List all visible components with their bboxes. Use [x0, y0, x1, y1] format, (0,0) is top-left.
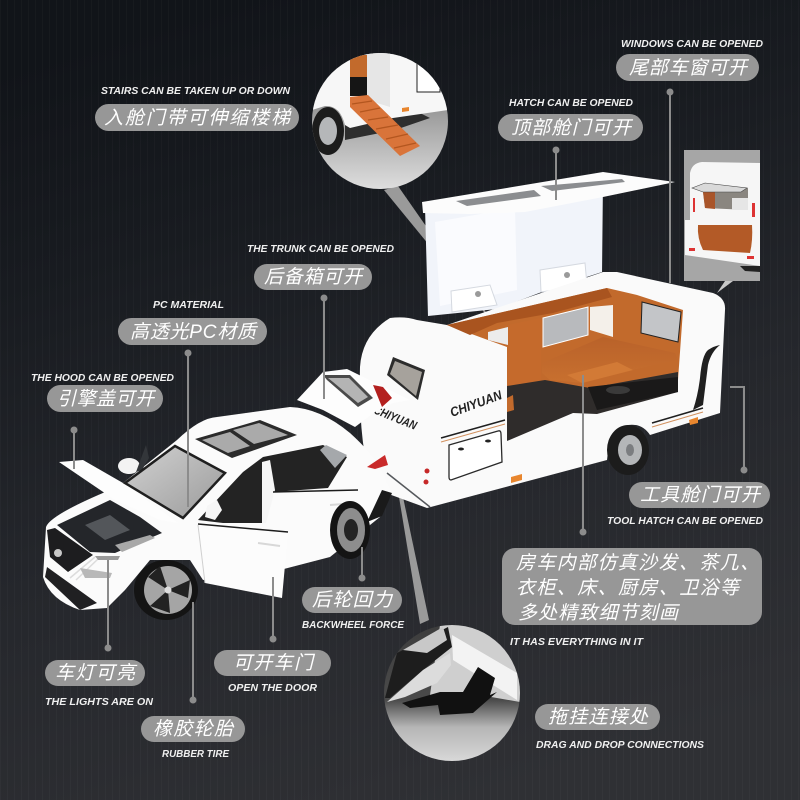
- label: PC material: 高透光PC材质: [130, 321, 259, 343]
- leader: trunk: [320, 294, 328, 399]
- label: lights: 车灯可亮: [55, 662, 138, 684]
- inset photo: rear windows: [684, 150, 760, 281]
- car: open hood: [59, 460, 178, 523]
- car: front wheel: [134, 560, 198, 620]
- label: trunk: [247, 244, 394, 290]
- car: interior and seats: [198, 445, 347, 523]
- label: windows can be opened: 尾部车窗可开: [629, 57, 750, 79]
- leader line: tow connection: [399, 497, 429, 624]
- trailer body: [360, 272, 725, 508]
- car: side mirror: [118, 445, 149, 474]
- leader: lights: [104, 560, 112, 652]
- leader: interior: [580, 375, 586, 536]
- car: sunroof: [195, 420, 297, 458]
- label: tool hatch: 工具舱门可开: [640, 484, 763, 506]
- label: back wheel force: 后轮回力: [312, 590, 394, 611]
- leader: tire: [190, 602, 196, 704]
- label: trunk: 后备箱可开: [264, 266, 365, 288]
- label: interior details: 衣柜、床、厨房、卫浴等: [516, 577, 742, 599]
- label: rubber tire: RUBBER TIRE: [162, 749, 229, 760]
- leader: windows: [666, 88, 674, 283]
- label: interior details: 房车内部仿真沙发、茶几、: [516, 552, 759, 574]
- label: interior details: [502, 548, 762, 648]
- label: interior details: IT HAS EVERYTHING IN IT: [510, 637, 644, 648]
- label: stairs: STAIRS CAN BE TAKEN UP OR DOWN: [101, 86, 291, 97]
- label: windows can be opened: [616, 39, 763, 81]
- connector: inset to trailer: [717, 281, 733, 293]
- label: hood: THE HOOD CAN BE OPENED: [31, 373, 174, 384]
- label: open the door: OPEN THE DOOR: [228, 683, 318, 694]
- label: hatch: [498, 98, 643, 141]
- label: stairs: 入舱门带可伸缩楼梯: [104, 107, 292, 129]
- callout circle: tow connection: [384, 625, 520, 761]
- label: hatch: 顶部舱门可开: [511, 117, 634, 139]
- label: interior details: 多处精致细节刻画: [518, 602, 680, 624]
- label: back wheel force: [302, 587, 404, 631]
- callout circle: stairs: [312, 53, 448, 189]
- label: PC material: PC MATERIAL: [153, 300, 224, 311]
- leader: hood: [70, 426, 78, 469]
- trailer logo: CHIYUAN front: CHIYUAN: [448, 387, 504, 420]
- label: stairs: [95, 86, 299, 131]
- label: windows can be opened: WINDOWS CAN BE OPENED: [621, 39, 763, 50]
- label: lights: THE LIGHTS ARE ON: [45, 697, 154, 708]
- label: hatch: HATCH CAN BE OPENED: [509, 98, 633, 109]
- leader: rear wheel: [358, 547, 366, 582]
- label: rubber tire: [141, 716, 245, 760]
- car: front door: [198, 524, 288, 598]
- label: rubber tire: 橡胶轮胎: [153, 718, 235, 740]
- trailer logo: CHIYUAN side: CHIYUAN: [372, 403, 419, 433]
- label: back wheel force: BACKWHEEL FORCE: [302, 620, 404, 631]
- label: drag and drop: [535, 704, 704, 751]
- leader: door: [270, 577, 276, 642]
- label: tool hatch: [607, 482, 770, 527]
- label: open the door: [214, 650, 331, 694]
- label: trunk: THE TRUNK CAN BE OPENED: [247, 244, 394, 255]
- car: grille and headlight: [45, 528, 120, 610]
- label: PC material: [118, 300, 267, 345]
- trailer roof hatch: [422, 172, 675, 316]
- trailer wheel: [607, 425, 649, 475]
- label: open the door: 可开车门: [233, 652, 316, 674]
- car: open tailgate: [297, 369, 410, 427]
- label: drag and drop: 拖挂连接处: [548, 707, 649, 728]
- label: lights: [45, 660, 154, 708]
- label: hood: [31, 373, 174, 412]
- label: drag and drop: DRAG AND DROP CONNECTIONS: [536, 740, 704, 751]
- car: windshield: [125, 446, 225, 518]
- leader: hatch: [552, 146, 560, 200]
- leader: PC material: [184, 350, 192, 507]
- car: rear wheel: [330, 501, 370, 559]
- car: engine bay: [57, 500, 162, 553]
- label: hood: 引擎盖可开: [57, 388, 157, 410]
- car: body: [43, 407, 392, 610]
- leader: tool hatch: [730, 387, 748, 474]
- car: rear door: [273, 490, 358, 558]
- label: tool hatch: TOOL HATCH CAN BE OPENED: [607, 516, 763, 527]
- leader line: stairs: [384, 186, 497, 328]
